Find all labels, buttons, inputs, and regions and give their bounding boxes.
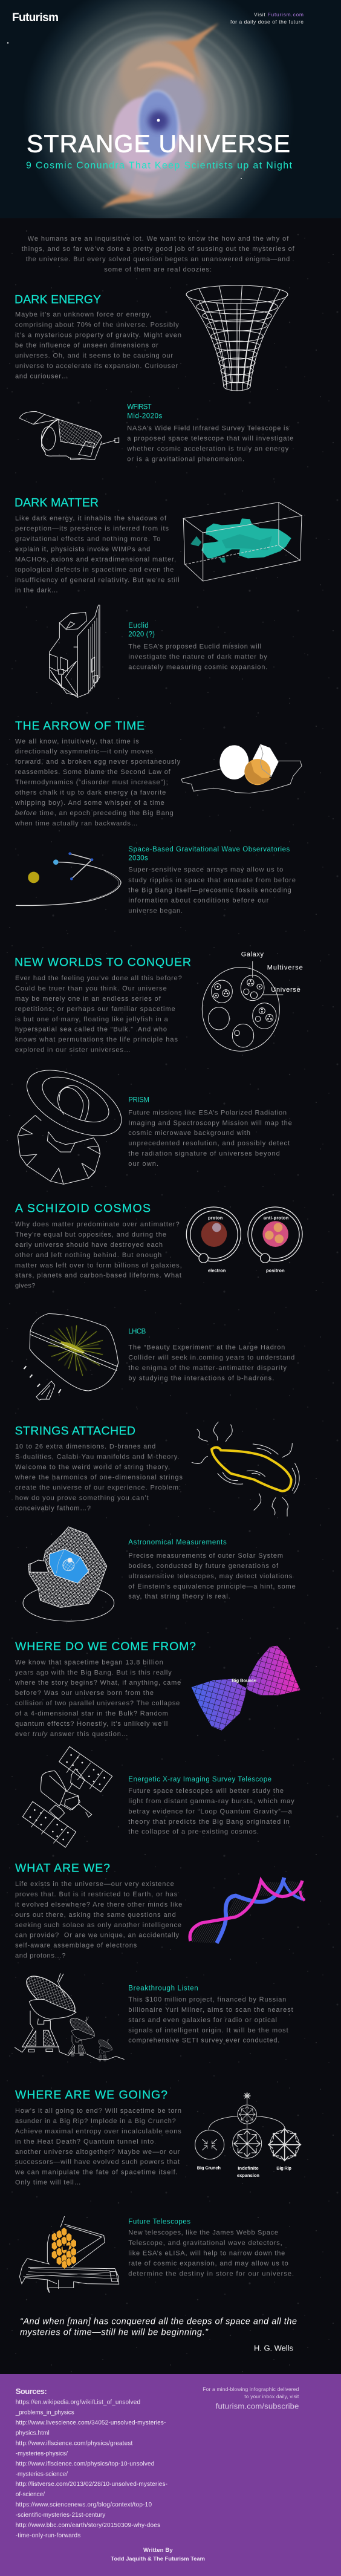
observatories label: Space-Based Gravitational Wave Observatories	[128, 846, 290, 853]
Breakthrough Listen label: Breakthrough Listen	[128, 1985, 198, 1992]
body text: asunder in a Big Rip? Implode in a Big Crunch?	[15, 2118, 176, 2125]
big bounce label: Big Bounce	[232, 1678, 256, 1683]
illustration: DNA helix	[190, 1878, 305, 1943]
body text: and curiouser…	[15, 372, 68, 380]
multiverse labels	[241, 951, 303, 994]
body text: quantum effects? Honestly, it’s unlikely we’ll	[15, 1720, 167, 1728]
illustration: LHCb collision event	[24, 1313, 119, 1400]
atom labels: proton	[208, 1215, 223, 1221]
X-ray telescope label: Energetic X-ray Imaging Survey Telescope	[128, 1776, 271, 1783]
sources list: -mysteries-physics/	[16, 2450, 68, 2457]
observatories label	[128, 846, 290, 862]
illustration: gravitational wave observatories	[16, 852, 121, 905]
body text: comprising about 70% of the universe. Possibly	[15, 322, 179, 329]
LHCb text: Collider will seek in coming years to understand	[128, 1355, 294, 1362]
body text: ours out there, asking the same questions and	[15, 1911, 176, 1919]
Breakthrough Listen text: signals of intelligent origin. It will be the most	[128, 2027, 288, 2034]
observatories text: the Big Bang itself—precosmic fossils encoding	[128, 887, 291, 894]
body text: collision of two parallel universes? The collapse	[15, 1700, 180, 1707]
panel: what are we	[15, 1862, 305, 2061]
heading: DARK ENERGY	[15, 293, 101, 306]
future telescopes text: determine the destiny in store for our universe.	[128, 2270, 294, 2277]
Euclid text	[128, 643, 267, 671]
sources list: https://www.sciencenews.org/blog/context/top-10	[16, 2502, 152, 2508]
illustration: Hubble-style telescope	[22, 1746, 112, 1847]
body text: whipping boy). And some whisper of a time	[15, 799, 164, 807]
body text: Why does matter predominate over antimatter?	[15, 1221, 180, 1228]
quote: H. G. Wells	[254, 2344, 294, 2353]
body text: can provide? Or are we unique, an accidentally	[15, 1932, 179, 1939]
body text: universes. Oh, and it seems to be causing our	[15, 352, 173, 359]
PRISM text: unprecedented resolution, and possibly detect	[128, 1140, 290, 1147]
subtitle: 9 Cosmic Conundra That Keep Scientists up at Night	[26, 160, 293, 171]
sources list: _problems_in_physics	[15, 2410, 74, 2416]
body text: stars, planets and carbon-based lifeforms. What	[15, 1272, 181, 1280]
astronomical measurements text: Precise measurements of outer Solar System	[128, 1552, 283, 1560]
fate labels	[197, 2165, 291, 2178]
X-ray telescope text: Future space telescopes will better study the	[128, 1787, 284, 1795]
visit tagline: for a daily dose of the future	[230, 19, 304, 25]
body text	[15, 1221, 182, 1290]
body text: S-dualities, Calabi-Yau manifolds and M-theory.	[15, 1454, 179, 1461]
multiverse labels: Universe	[271, 986, 300, 994]
observatories text: information about conditions before our	[128, 897, 269, 905]
astronomical measurements text: ultrasensitive telescopes, may detect violations	[128, 1573, 293, 1580]
body text: is but one of many, floating like jellyfish in a	[15, 1016, 169, 1023]
X-ray telescope text: the collapse of a pre-existing cosmos.	[128, 1829, 259, 1836]
credits	[111, 2547, 205, 2563]
intro text: the universe. But every solved question begets an unanswered enigma—and	[26, 256, 290, 263]
heading: A SCHIZOID COSMOS	[15, 1202, 151, 1215]
atom labels: electron	[208, 1267, 226, 1273]
quote	[20, 2317, 297, 2353]
X-ray telescope text: light from distant gamma-ray bursts, which may	[128, 1798, 294, 1805]
LHCb text: the enigma of the matter-antimatter disparity	[128, 1365, 287, 1372]
Euclid label: Euclid	[128, 622, 149, 629]
LHCb text: by studying the interactions of b-hadrons.	[128, 1375, 274, 1382]
X-ray telescope text: betray evidence for “Loop Quantum Gravity”—a	[128, 1808, 293, 1815]
body text: knows what permutations the life principle has	[15, 1036, 178, 1044]
body text: Like dark energy, it inhabits the shadows of	[15, 515, 167, 522]
WFIRST text: whether cosmic acceleration is truly an energy	[126, 445, 289, 452]
body text: seeking such solace as only another intelligence	[15, 1922, 181, 1929]
body text: insufficiency of general relativity. But we’re still	[15, 576, 180, 584]
heading: NEW WORLDS TO CONQUER	[15, 955, 191, 969]
body text: conceivably fathom…?	[15, 1504, 91, 1512]
body text: repetitions; or perhaps our familiar spacetime	[15, 1006, 175, 1013]
body text: perception—its presence is inferred from its	[15, 525, 169, 533]
illustration: spacetime funnel	[186, 285, 288, 391]
sources list: http://www.iflscience.com/physics/top-10-unsolved	[16, 2461, 154, 2467]
sources list: http://listverse.com/2013/02/28/10-unsolved-mysteries-	[16, 2481, 167, 2488]
Euclid text: The ESA’s proposed Euclid mission will	[128, 643, 261, 651]
body text: and protons…?	[15, 1953, 65, 1960]
body text: universe to accelerate its expansion. Curiouser	[15, 363, 178, 370]
observatories text: universe began.	[128, 908, 183, 915]
sources heading: Sources:	[16, 2387, 47, 2396]
sources list: -time-only-run-forwards	[16, 2532, 80, 2539]
illustration: observatory telescope	[23, 1527, 114, 1621]
body text: years ago with the Big Bang. But is this really	[15, 1669, 172, 1676]
body text	[15, 1443, 183, 1512]
Euclid text: investigate the nature of dark matter by	[128, 654, 267, 661]
PRISM label: PRISM	[128, 1096, 149, 1104]
observatories text: study ripples in space that emanate from before	[128, 877, 296, 884]
heading: WHERE ARE WE GOING?	[15, 2088, 167, 2101]
body text: where the story begins? What, if anything, came	[15, 1679, 181, 1686]
illustration: matter and antimatter atoms	[186, 1207, 302, 1263]
LHCb label: LHCB	[128, 1329, 146, 1336]
body text: explored in our sister universes…	[15, 1047, 131, 1054]
sources list: physics.html	[16, 2430, 50, 2437]
body text: matter was left over to form billions of galaxies,	[15, 1262, 182, 1269]
quote: mysteries of time—still he will be beginning.”	[20, 2328, 209, 2338]
future telescopes text	[128, 2230, 294, 2277]
Breakthrough Listen text: This $100 million project, financed by Russian	[128, 1996, 286, 2003]
body text: self-aware assemblage of electrons	[15, 1942, 137, 1950]
body text: another universe altogether? Maybe we—or our	[15, 2148, 180, 2156]
body text: others chalk it up to dark energy (a favorite	[15, 789, 166, 796]
panel: dark matter	[15, 496, 302, 697]
body text: before? Was our universe born from the	[15, 1690, 154, 1697]
Euclid text: accurately measuring cosmic expansion.	[128, 664, 267, 671]
WFIRST text: NASA’s Wide Field Infrared Survey Telescope is	[127, 424, 289, 432]
X-ray telescope text	[128, 1787, 294, 1836]
Breakthrough Listen text	[128, 1996, 293, 2044]
fate labels: Big Rip	[276, 2165, 291, 2171]
subscribe callout: to your inbox daily, visit	[244, 2393, 299, 2399]
body text: create the universe of our experience. Problem:	[15, 1484, 181, 1491]
visit tagline	[230, 11, 304, 25]
atom labels	[208, 1215, 289, 1273]
illustration: big bounce	[192, 1646, 300, 1731]
body text	[15, 1659, 181, 1738]
future telescopes text: New telescopes, like the James Webb Space	[128, 2230, 278, 2237]
heading: STRINGS ATTACHED	[15, 1425, 135, 1438]
astronomical measurements text: of Einstein’s equivalence principle—a hint, some	[128, 1583, 296, 1590]
body text: it evolved elsewhere? Are there other minds like	[15, 1901, 182, 1908]
body text: forward, and a broken egg never spontaneously	[15, 758, 181, 766]
sources list: http://www.livescience.com/34052-unsolved-mysteries-	[16, 2420, 166, 2427]
Euclid label: 2020 (?)	[128, 631, 155, 639]
illustration: vibrating string	[192, 1422, 299, 1516]
body text: How’s it all going to end? Will spacetime be torn	[15, 2107, 181, 2115]
LHCb text: The “Beauty Experiment” at the Large Hadron	[128, 1344, 285, 1351]
body text: hyperspatial sea called the “Bulk.” And who	[15, 1026, 167, 1033]
illustration: Euclid spacecraft	[50, 605, 100, 697]
illustration: James Webb Space Telescope	[19, 2216, 119, 2293]
astronomical measurements text: say, that string theory is real.	[128, 1593, 230, 1601]
PRISM text: cosmic microwave background with	[128, 1130, 250, 1137]
heading: DARK MATTER	[15, 496, 99, 509]
future telescopes label: Future Telescopes	[128, 2218, 190, 2225]
body text	[15, 515, 180, 594]
PRISM text: Future missions like ESA’s Polarized Radiation	[128, 1109, 287, 1116]
multiverse labels: Multiverse	[267, 964, 303, 972]
multiverse labels: Galaxy	[241, 951, 264, 958]
PRISM text: the radiation signature of universes beyond	[128, 1150, 280, 1157]
fate labels: expansion	[237, 2173, 259, 2178]
body text: it’s a mysterious property of gravity. Might even	[15, 332, 181, 339]
astronomical measurements text	[128, 1552, 296, 1601]
body text	[15, 975, 182, 1054]
fate labels: Big Crunch	[197, 2165, 221, 2171]
body text: how do you prove something you can’t	[15, 1494, 149, 1501]
illustration: dark matter box	[183, 503, 302, 581]
body text: ever truly answer this question…	[15, 1731, 128, 1738]
body text: successors—will have evolved such powers that	[15, 2159, 180, 2166]
body text: gives?	[15, 1283, 35, 1290]
sources list	[15, 2399, 167, 2539]
body text: Life exists in the universe—our very existence	[15, 1881, 174, 1888]
credits: Todd Jaquith & The Futurism Team	[111, 2556, 205, 2563]
sources list: http://www.bbc.com/earth/story/20150309-why-does	[16, 2522, 160, 2529]
body text: We all know, intuitively, that time is	[15, 738, 139, 745]
panel: where do we come from	[15, 1640, 300, 1847]
body text: early universe should have destroyed each	[15, 1241, 163, 1249]
body text: We know that spacetime began 13.8 billion	[15, 1659, 163, 1666]
body text	[15, 738, 181, 827]
astronomical measurements label: Astronomical Measurements	[128, 1539, 227, 1546]
body text: we can manipulate the fate of spacetime itself.	[15, 2169, 178, 2176]
sources list: -mysteries-science/	[16, 2471, 68, 2477]
future telescopes text: rate of cosmic expansion, and may allow us to	[128, 2260, 288, 2268]
body text: in the dark…	[15, 587, 58, 594]
body text: explain it, physicists invoke WIMPs and	[15, 545, 150, 553]
panel: a schizoid cosmos	[15, 1202, 302, 1400]
panel: strings attached	[15, 1422, 299, 1621]
body text: Thermodynamics (“disorder must increase”);	[15, 779, 168, 786]
body text	[15, 311, 181, 380]
WFIRST text	[126, 424, 293, 463]
body text: directionally asymmetric—it only moves	[15, 748, 154, 755]
sources list: https://en.wikipedia.org/wiki/List_of_unsolved	[16, 2399, 140, 2406]
body text: Maybe it’s an unknown force or energy,	[15, 311, 151, 319]
WFIRST label	[127, 404, 163, 420]
illustration: fate of the universe diagram	[195, 2092, 300, 2161]
observatories text	[128, 867, 296, 915]
quote: “And when [man] has conquered all the deeps of space and all the	[20, 2317, 297, 2326]
intro text: things, and so far we’ve done a pretty good job of sussing out the mysteries of	[22, 246, 295, 253]
Breakthrough Listen text: comprehensive SETI survey ever conducted.	[128, 2037, 279, 2044]
title: STRANGE UNIVERSE	[27, 130, 290, 158]
body text: other and left nothing behind. But enough	[15, 1252, 161, 1259]
future telescopes text: Telescope, and gravitational wave detectors,	[128, 2240, 282, 2247]
heading: WHERE DO WE COME FROM?	[15, 1640, 196, 1653]
heading: THE ARROW OF TIME	[15, 719, 145, 732]
Breakthrough Listen text: stars and even galaxies for radio or optical	[128, 2017, 277, 2024]
atom labels: anti-proton	[264, 1215, 289, 1221]
WFIRST text: or is a gravitational phenomenon.	[127, 455, 244, 463]
atom labels: positron	[266, 1267, 285, 1273]
observatories text: Super-sensitive space arrays may allow us to	[128, 867, 283, 874]
X-ray telescope text: theory that predicts the Big Bang originated in	[128, 1818, 290, 1826]
future telescopes text: like ESA’s eLISA, will help to narrow down the	[128, 2250, 285, 2257]
LHCb text	[128, 1344, 294, 1382]
WFIRST text: a proposed space telescope that will investigate	[127, 435, 293, 442]
body text: Achieve maximal entropy over incalculable eons	[15, 2128, 181, 2135]
body text: Ever had the feeling you’ve done all this before?	[15, 975, 182, 982]
body text: Welcome to the weird world of string theory,	[15, 1464, 170, 1471]
body text: topological defects in spacetime and even the	[15, 566, 174, 573]
footer panel	[0, 2374, 341, 2576]
nebula image	[0, 0, 341, 218]
body text	[15, 2107, 181, 2187]
body text: may be merely one in an endless series of	[15, 995, 161, 1003]
WFIRST label: WFIRST	[127, 404, 152, 411]
PRISM text: our own.	[128, 1160, 158, 1168]
credits: Written By	[143, 2547, 173, 2554]
intro text	[22, 235, 295, 273]
PRISM text: Imaging and Spectroscopy Mission will map the	[128, 1119, 292, 1127]
illustration: WFIRST telescope	[19, 412, 119, 460]
Euclid label	[128, 622, 155, 639]
sources list: http://www.iflscience.com/physics/greatest	[16, 2440, 133, 2447]
body text: where the harmonics of one-dimensional strings	[15, 1474, 183, 1482]
body text: when time actually ran backwards…	[15, 820, 138, 827]
subscribe callout: futurism.com/subscribe	[216, 2401, 299, 2410]
body text: They’re equal but opposites, and during the	[15, 1231, 166, 1238]
WFIRST label: Mid-2020s	[127, 412, 163, 420]
panel: new worlds to conquer	[15, 951, 303, 1184]
panel: the arrow of time	[15, 719, 302, 915]
visit tagline: Visit Futurism.com	[254, 11, 304, 18]
body text: before time, an epoch preceding the Big Bang	[15, 810, 174, 817]
body text	[15, 1881, 182, 1960]
body text: Could be truer than you think. Our universe	[15, 985, 167, 992]
fate labels: Indefinite	[238, 2165, 259, 2171]
illustration: radio dishes	[15, 1969, 125, 2061]
intro text: some of them are real doozies:	[104, 266, 212, 273]
PRISM text	[128, 1109, 292, 1168]
panel: dark energy	[15, 285, 293, 463]
body text: MACHOs, axions and extradimensional matter,	[15, 556, 176, 563]
body text: gravitational effects and nothing more. To	[15, 536, 160, 543]
logo: Futurism: Futurism	[12, 11, 59, 24]
illustration: multiverse diagram	[202, 961, 283, 1051]
body text: 10 to 26 extra dimensions. D-branes and	[15, 1443, 155, 1451]
Breakthrough Listen text: billionaire Yuri Milner, aims to scan the nearest	[128, 2006, 293, 2014]
sources list: -scientific-mysteries-21st-century	[16, 2512, 105, 2519]
observatories label: 2030s	[128, 854, 148, 862]
illustration: broken egg	[181, 744, 302, 793]
subscribe callout	[203, 2386, 299, 2410]
sources list: of-science/	[16, 2491, 45, 2498]
panel: where are we going	[15, 2088, 300, 2293]
body text: of a 4-dimensional star in the Bulk? Random	[15, 1710, 168, 1717]
body text: in the Heat Death? Quantum tunnel into	[15, 2138, 154, 2145]
subscribe callout: For a mind-blowing infographic delivered	[203, 2386, 299, 2392]
header panel: nebula	[0, 0, 341, 218]
heading: WHAT ARE WE?	[15, 1862, 110, 1875]
astronomical measurements text: bodies, conducted by future generations of	[128, 1563, 279, 1570]
body text: reassembles. Some blame the Second Law of	[15, 769, 171, 776]
illustration: PRISM spacecraft	[17, 1056, 132, 1184]
body text: proves that. But is it restricted to Earth, or has	[15, 1891, 178, 1898]
body text: be the influence of unseen dimensions or	[15, 342, 158, 350]
body text: Only time will tell…	[15, 2179, 81, 2187]
intro text: We humans are an inquisitive lot. We want to know the how and the why of	[28, 235, 289, 242]
